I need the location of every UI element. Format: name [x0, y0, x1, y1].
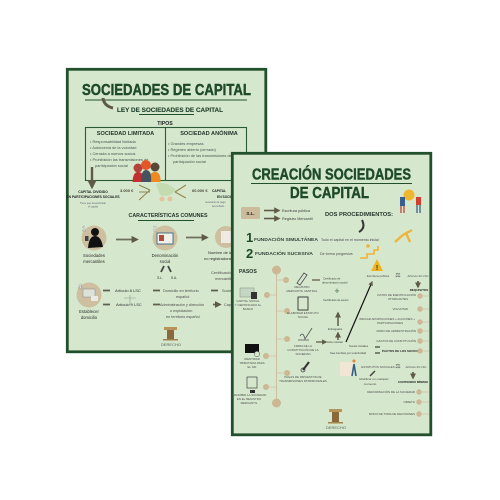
requisitos timeline: MODO DE ADMINISTRACIÓN — [376, 328, 416, 333]
articles and consequences: español — [176, 295, 189, 299]
estatutos sociales block: Modificar en cualquier — [359, 377, 389, 381]
step: impuestos — [279, 362, 327, 383]
articles and consequences: Artículo 9 LSC — [116, 302, 142, 307]
requisitos timeline — [359, 292, 429, 354]
icon: people and lightbulb — [400, 190, 421, 213]
estatutos sociales block: Artículo 23 LSC — [405, 365, 427, 369]
procedure 1 — [246, 230, 412, 245]
step: identidad tributaria: EL NIF — [248, 365, 257, 369]
step: identidad tributaria: TRIBUTARIA PARA — [239, 361, 265, 365]
S.L. requirements — [264, 209, 313, 221]
table: tipos de sociedad: SOCIEDAD LIMITADA — [97, 131, 154, 137]
step 3: nombre: Nombre de la — [208, 250, 233, 255]
step 2: denominación social: S.L. — [157, 276, 163, 280]
middle flow: ✚ — [334, 288, 340, 295]
escritura pública block: REQUISITOS — [410, 288, 428, 292]
step: identidad tributaria: IDENTIDAD — [244, 357, 260, 361]
step 3: nombre: Certificación — [211, 270, 233, 275]
S.L. requirements: Escritura pública — [282, 209, 311, 213]
articles and consequences: o explotación — [170, 309, 192, 313]
S.L. requirements: Registro Mercantil — [282, 217, 313, 221]
articles and consequences: Domicilio en territorio — [163, 289, 199, 293]
step 3: nombre: mercantil — [215, 276, 231, 281]
step 1: sociedades mercantiles: mercantiles — [83, 259, 105, 264]
articles and consequences: Administración y dirección — [160, 303, 204, 307]
arrow: to escritura pública — [346, 282, 372, 342]
step 2: denominación social: Denominación — [152, 253, 179, 258]
escritura pública block: Escritura pública — [367, 274, 389, 278]
text: capital dividido: CAPITAL DIVIDIDO — [78, 190, 108, 194]
step 2: denominación social: social — [160, 259, 170, 264]
amounts and capital icon: EN SOCIOS — [217, 195, 236, 199]
step: elaborar estatuto social — [287, 297, 319, 319]
step: identidad tributaria — [239, 344, 265, 369]
arrow: capital dividido — [91, 167, 93, 187]
subtitle: ley de sociedades de capital: LEY DE SOCIEDADES DE CAPITAL — [117, 107, 223, 114]
step: elaborar estatuto social: ELABORAR ESTATUTO — [287, 311, 319, 315]
title: creación sociedades de capital: DE CAPITAL — [290, 185, 369, 202]
procedure 1: 1 — [246, 230, 253, 245]
table: tipos de sociedad: • Régimen abierto (cerrado) — [168, 147, 217, 152]
middle flow: PACTOS DE LOS SOCIOS — [382, 349, 419, 353]
step: firma: CONSTITUCIÓN DE LA — [287, 347, 319, 352]
step: firma: SOCIEDAD — [295, 352, 311, 356]
step: registro mercantil central: REGISTRO — [294, 285, 310, 289]
requisitos timeline: VOLUNTAD — [392, 307, 408, 311]
logo: derecho — [161, 327, 181, 347]
timeline left — [263, 266, 290, 408]
amounts and capital icon: necesario de pago — [205, 201, 226, 204]
step 4: establecer domicilio — [76, 282, 102, 320]
logo: derecho — [326, 409, 346, 430]
step 1: sociedades mercantiles: 1 — [82, 226, 86, 233]
step: capital social: CAPITAL SOCIAL — [236, 299, 260, 303]
arrow — [186, 236, 207, 238]
step 4: establecer domicilio: 4 — [78, 284, 82, 291]
text: capital dividido: el capital — [88, 206, 98, 208]
articles and consequences: Sociedad — [222, 289, 238, 293]
escritura pública block: ⚖ — [395, 272, 401, 279]
step: inscribir: EN EL REGISTRO — [237, 397, 262, 401]
amounts and capital icon: 60.000 € — [192, 188, 208, 193]
estatutos sociales block: ESTATUTOS SOCIALES — [361, 365, 395, 369]
step 4: establecer domicilio: domicilio — [81, 315, 98, 320]
amounts and capital icon: CAPITAL — [212, 189, 226, 193]
step: inscribir: INSCRIBIR LA SOCIEDAD — [232, 393, 266, 397]
step 3: nombre: no registradora — [204, 256, 232, 261]
table: tipos de sociedad: • Prohibición las transmisiones de — [90, 157, 148, 162]
articles and consequences — [103, 288, 238, 319]
middle flow: Certificado de — [323, 276, 341, 280]
step: impuestos: TRANSMISIONES PATRIMONIALES — [279, 379, 327, 383]
middle flow: Sea inscritas por unanimidad — [330, 351, 367, 355]
estatutos sociales block — [340, 360, 429, 417]
text: capital dividido: Tiene que desembolsar — [80, 202, 106, 205]
middle flow: Certificado de sanos — [323, 298, 349, 302]
title: creación sociedades de capital: CREACIÓN SOCIEDADES — [252, 164, 411, 184]
procedure 2 — [246, 244, 378, 261]
table: tipos de sociedad: • Cerrada a nuevos socios — [90, 151, 136, 156]
heading: pasos: PASOS — [239, 269, 257, 275]
table: tipos de sociedad: participación social — [95, 163, 128, 168]
text: capital dividido: EN PARTICIPACIONES SOCIALES — [66, 195, 120, 199]
step: firma: FIRMA DE LA — [294, 344, 312, 348]
middle flow: denominación social — [322, 280, 348, 284]
panel: sociedades de capital — [66, 69, 266, 352]
step 1: sociedades mercantiles — [82, 226, 106, 264]
arrow — [116, 238, 137, 240]
estatutos sociales block: OBJETO — [403, 400, 416, 404]
articles and consequences: Artículo 8 LSC — [115, 288, 141, 293]
icon: three people — [132, 160, 161, 182]
table: tipos de sociedad: participación social — [173, 159, 206, 164]
requisitos timeline: OTORGANTES — [388, 297, 408, 301]
step: registro mercantil central — [287, 273, 318, 293]
escritura pública block: Artículo 22 LSC — [407, 274, 429, 278]
step 2: denominación social: S.A. — [171, 276, 177, 280]
estatutos sociales block: momento — [364, 382, 377, 386]
arrow: curved — [359, 220, 363, 232]
title: sociedades de capital: SOCIEDADES DE CAPITAL — [82, 82, 251, 99]
procedure 1: Todo el capital en el momento inicial — [321, 238, 379, 242]
amounts and capital icon: acumulado — [212, 205, 225, 208]
step: registro mercantil central: MERCANTIL CENTRAL — [287, 289, 318, 293]
procedure 2: 2 — [246, 246, 253, 261]
amounts and capital icon: 3.000 € — [120, 188, 134, 193]
panel: creación sociedades de capital — [232, 153, 431, 435]
requisitos timeline: GASTOS DE CONSTITUCIÓN — [376, 338, 416, 343]
step: capital social: Y CERTIFICADO AL — [235, 303, 262, 307]
step: firma — [287, 328, 319, 356]
step 2: denominación social: 2 — [153, 226, 157, 233]
icon: warning — [371, 259, 383, 272]
articles and consequences: en territorio español — [166, 315, 200, 319]
step 3: nombre — [204, 226, 237, 281]
requisitos timeline: INDICAR APORTACIONES + ACCIONES + — [359, 317, 415, 321]
step: elaborar estatuto social: SOCIAL — [298, 315, 309, 319]
middle flow — [312, 276, 419, 355]
tag: S.L.: S.L. — [246, 211, 255, 216]
middle flow: Acta notarial — [327, 340, 343, 344]
table: tipos de sociedad: • Prohibición de las transmisiones de — [168, 153, 232, 158]
procedure 2: De forma progresiva — [320, 252, 353, 256]
subtitle: ley de sociedades de capital — [103, 98, 223, 114]
table: tipos de sociedad: SOCIEDAD ANÓNIMA — [180, 129, 238, 137]
table: tipos de sociedad — [86, 128, 246, 180]
table: tipos de sociedad: • Autonomía de la voluntad — [90, 145, 136, 150]
procedure 2: FUNDACIÓN SUCESIVA — [255, 251, 313, 256]
text: capital dividido — [66, 190, 120, 208]
requisitos timeline: DATOS DE IDENTIFICACIÓN — [377, 292, 416, 297]
escritura pública block — [367, 272, 429, 292]
logo: derecho: DERECHO — [161, 342, 181, 347]
heading: dos procedimientos: DOS PROCEDIMIENTOS: — [325, 212, 393, 218]
estatutos sociales block: CONTENIDO MÍNIMO — [398, 379, 429, 384]
icon: warning: ! — [376, 265, 378, 272]
logo: derecho: DERECHO — [326, 425, 346, 430]
title: creación sociedades de capital — [251, 164, 412, 202]
step 1: sociedades mercantiles: Sociedades — [83, 253, 105, 258]
heading: tipos: TIPOS — [157, 121, 173, 127]
step 2: denominación social — [152, 226, 179, 280]
step: inscribir: MERCANTIL — [241, 401, 258, 405]
tag: S.L. — [241, 207, 260, 219]
procedure 1: FUNDACIÓN SIMULTÁNEA — [254, 237, 318, 242]
estatutos sociales block: ⚖ — [395, 363, 401, 370]
requisitos timeline: PARTICIPACIONES — [377, 321, 403, 325]
step: capital social: BANCO — [243, 307, 254, 311]
step: inscribir — [232, 377, 266, 405]
middle flow: Entregados — [328, 327, 343, 331]
amounts and capital icon — [120, 183, 236, 208]
step: capital social — [235, 288, 262, 311]
table: tipos de sociedad: • Grandes empresas — [168, 141, 204, 146]
middle flow: Socios iniciales — [349, 344, 369, 348]
articles and consequences: Capital — [224, 303, 236, 307]
estatutos sociales block: DENOMINACIÓN DE LA SOCIEDAD — [367, 389, 415, 394]
heading: características comunes: CARACTERÍSTICAS COMUNES — [128, 211, 208, 219]
estatutos sociales block: MODO DE TOMA DE DECISIONES — [369, 412, 415, 416]
heading: características comunes — [128, 211, 208, 220]
table: tipos de sociedad: • Responsabilidad limitada — [90, 139, 137, 144]
step: impuestos: PAGAS DE IMPUESTOS DE — [284, 375, 322, 379]
step 4: establecer domicilio: Establecer — [79, 309, 99, 314]
